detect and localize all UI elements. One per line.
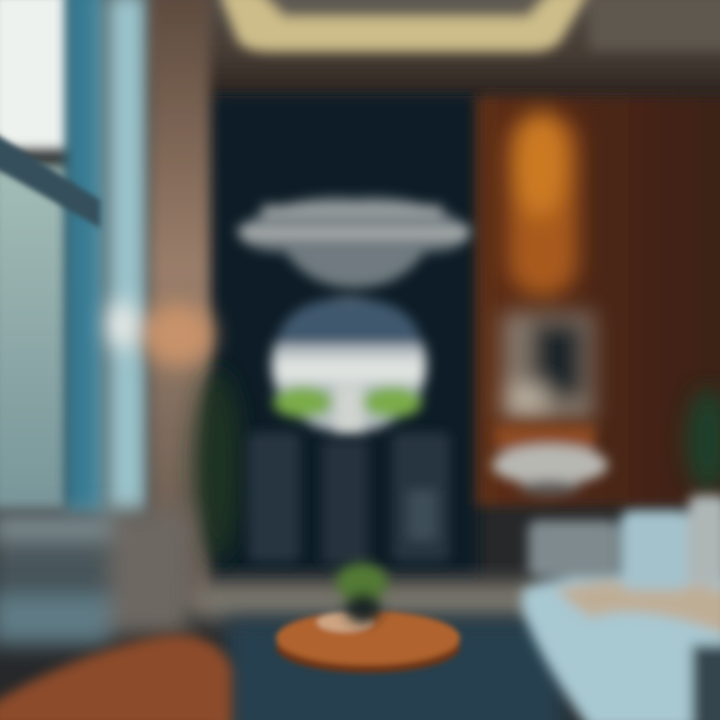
round coffee table [276,611,460,673]
wall sconce glow [508,112,578,297]
floor band [195,582,545,620]
left armchair [0,635,232,720]
wood wall [476,96,720,506]
window: sky [0,0,70,150]
window: blue column [66,0,104,515]
ceiling [150,0,720,95]
console shelf [492,425,608,496]
sofa [522,495,720,720]
wall picture [502,312,594,420]
left plant [194,370,242,560]
artwork: lower panels [248,432,450,565]
rug [225,618,565,720]
dark feature wall [212,96,478,576]
floor lamp glow [108,301,214,367]
ceiling light frame [218,0,590,52]
table plant [336,563,388,623]
window: glass with city view [0,165,68,510]
window: dark diagonal frame [0,130,100,228]
artwork: wings [236,197,472,288]
right plant [686,388,720,492]
window: light blue panel [104,0,150,520]
curtain [150,0,210,610]
artwork: circle emblem [271,297,427,435]
window sill and left bench [0,510,190,645]
